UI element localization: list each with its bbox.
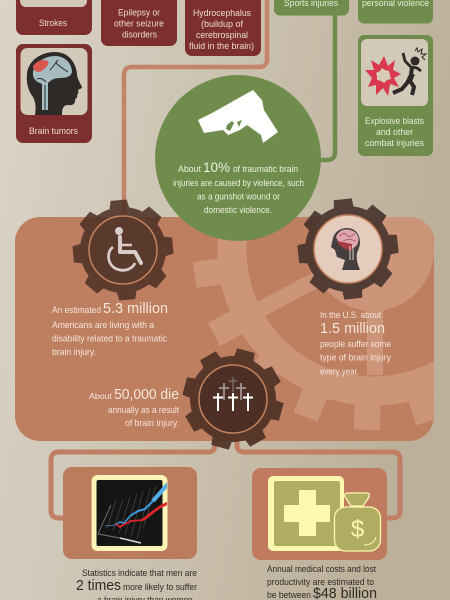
text: 50,000 die: of brain injury. [125, 418, 179, 428]
connector: causes bracket [124, 0, 267, 225]
icon: money bag: $ [351, 516, 364, 543]
gear: wheelchair [72, 199, 174, 301]
circle: violence: of traumatic brain [233, 164, 298, 174]
text: 5.3 million: disability related to a traumatic [52, 334, 167, 344]
circle: violence: as a gunshot wound or [197, 192, 280, 202]
panel: medical costs [252, 468, 387, 560]
background gear [193, 217, 434, 430]
text: 2 times: Statistics indicate that men are [82, 568, 197, 578]
connector: right bottom [237, 440, 400, 518]
icon: wheelchair [109, 227, 141, 270]
panel: line chart [63, 467, 197, 559]
icon: head with tumor [27, 52, 82, 115]
text: 1.5 million [320, 310, 391, 376]
card: explosive blasts [358, 35, 433, 156]
text: 1.5 million: type of brain injury [320, 352, 391, 362]
circle: violence [155, 75, 321, 241]
card: strokes: Strokes [39, 18, 67, 28]
card: hydrocephalus: Hydrocephalus [193, 8, 251, 18]
card: hydrocephalus: fluid in the brain) [189, 41, 254, 51]
card: explosive blasts: and other [376, 127, 413, 137]
text: 5.3 million: 5.3 million [103, 301, 168, 317]
text: 48 billion: Annual medical costs and lost [267, 564, 376, 574]
text: 50,000 die: annually as a result [108, 405, 179, 415]
text: 2 times [76, 568, 197, 600]
circle: violence: About [178, 164, 201, 174]
text: 1.5 million: 1.5 million [320, 321, 385, 337]
text: 50,000 die: About [89, 391, 113, 401]
card: brain tumors: Brain tumors [29, 126, 78, 136]
text: 50,000 die [89, 387, 179, 428]
text: 48 billion: be between [267, 590, 311, 600]
text: 48 billion [267, 564, 377, 600]
card: hydrocephalus: cerebrospinal [196, 30, 248, 40]
text: 5.3 million [52, 301, 168, 357]
text: 48 billion: productivity are estimated to [267, 577, 374, 587]
circle: violence: 10% [203, 159, 230, 175]
card: hydrocephalus [185, 0, 261, 56]
card: strokes [16, 0, 92, 35]
icon: handgun [198, 90, 278, 143]
gear: crosses [182, 348, 284, 450]
text: 2 times: 2 times [76, 577, 121, 594]
text: 50,000 die: 50,000 die [114, 387, 179, 403]
card: epilepsy [101, 0, 177, 46]
text: 5.3 million: Americans are living with a [52, 320, 155, 330]
chart: rising lines [98, 484, 168, 543]
connector: violence line [315, 12, 335, 160]
card: epilepsy: other seizure [114, 18, 164, 28]
text: 1.5 million: people suffer some [320, 339, 391, 349]
connector: left bottom [51, 440, 215, 518]
text: 1.5 million: every year. [320, 366, 359, 376]
icon: explosion and running figure [365, 48, 426, 96]
icon: crosses [213, 377, 253, 411]
card: sports injuries [274, 0, 349, 16]
icon: head with brain [331, 228, 360, 270]
card: epilepsy: disorders [122, 30, 157, 40]
card: explosive blasts: combat injuries [365, 138, 424, 148]
card: epilepsy: Epilepsy or [118, 8, 160, 18]
circle: violence: domestic violence. [204, 205, 272, 215]
circle: violence: injuries are caused by violence, such [173, 178, 304, 188]
panel: statistics [15, 217, 434, 441]
card: hydrocephalus: (buildup of [201, 19, 243, 29]
gear: brain head [297, 198, 399, 300]
text: 1.5 million: In the U.S. about [320, 310, 381, 320]
icon: medical cross [268, 476, 344, 551]
text: 5.3 million: An estimated [52, 305, 101, 315]
card: brain tumors [16, 44, 92, 143]
card: explosive blasts: Explosive blasts [365, 116, 424, 126]
card: personal violence [358, 0, 433, 24]
text: 2 times: more likely to suffer [123, 582, 197, 592]
text: 5.3 million: brain injury. [52, 347, 96, 357]
